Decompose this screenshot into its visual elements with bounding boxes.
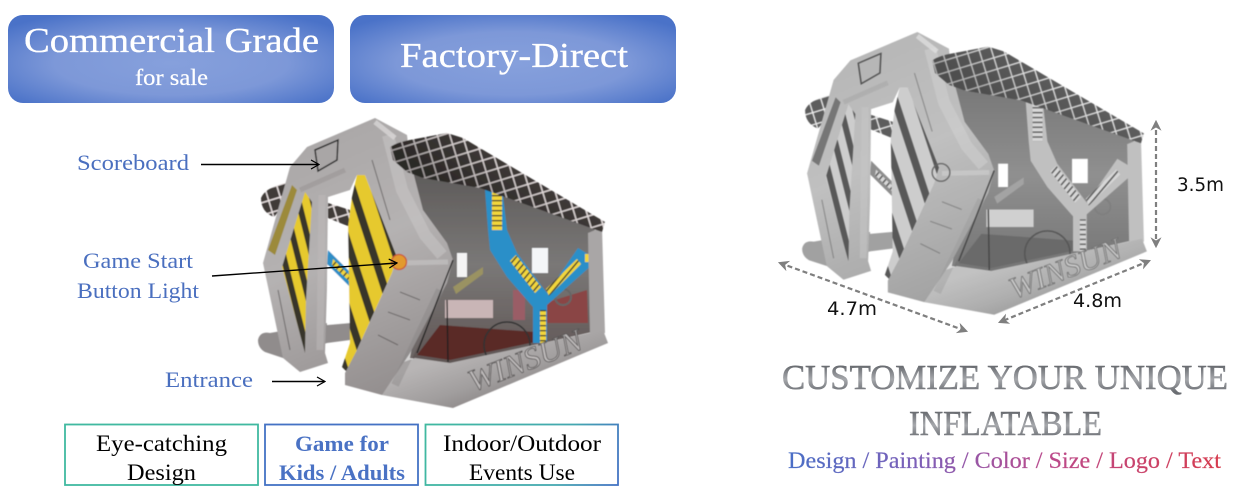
window area	[947, 78, 1134, 272]
rear gold lettering strip	[268, 185, 297, 255]
Y beam	[1026, 99, 1132, 251]
arch and legs frame	[263, 118, 453, 395]
heading: customize: INFLATABLE	[909, 404, 1102, 443]
banner: factory-direct	[350, 15, 676, 103]
window area	[405, 165, 595, 364]
feature box: indoor/outdoor events use: Events Use	[469, 460, 575, 485]
banner: commercial grade	[8, 15, 334, 103]
net roof tube	[932, 47, 1144, 143]
scoreboard outline	[315, 140, 338, 171]
customization options: Design / Painting / Color / Size / Logo / Text	[788, 448, 1222, 473]
zipper lines	[417, 260, 453, 362]
dimension: height: 3.5m	[1177, 174, 1224, 196]
callout: game start button light	[77, 248, 397, 303]
callout: game start button light: Game Start	[83, 248, 193, 273]
floor base	[924, 239, 1147, 315]
dimension: depth: 4.8m	[1073, 290, 1122, 312]
scoreboard outline	[858, 54, 881, 84]
feature box: eye-catching design	[65, 424, 258, 485]
front hazard stripes panel	[885, 88, 939, 280]
start button light	[392, 254, 406, 270]
banner: factory-direct: Factory-Direct	[400, 36, 628, 75]
feature box: indoor/outdoor events use	[426, 424, 618, 485]
banner: commercial grade: for sale	[135, 65, 208, 90]
brand: WINSUN: WINSUN	[463, 321, 590, 399]
feature box: game for kids / adults: Kids / Adults	[279, 460, 405, 485]
right post	[1127, 138, 1144, 246]
heading: customize	[782, 358, 1228, 443]
callout: entrance: Entrance	[165, 367, 253, 392]
dimension: height	[1156, 122, 1224, 246]
back net tube	[261, 183, 296, 217]
rear hazard stripes	[282, 192, 312, 353]
feature box: game for kids / adults: Game for	[295, 431, 389, 456]
frame highlights	[822, 36, 989, 292]
callout: game start button light: Button Light	[77, 278, 199, 303]
dimension: depth	[1000, 261, 1149, 322]
window interior details	[417, 248, 588, 368]
feature box: eye-catching design: Eye-catching	[96, 431, 228, 456]
arch and legs frame	[807, 32, 994, 302]
blue Y beam	[485, 187, 593, 343]
zipper lines	[959, 170, 994, 270]
rear lettering strip	[812, 97, 841, 166]
dimension: width: 4.7m	[827, 298, 877, 320]
callout: scoreboard: Scoreboard	[77, 150, 189, 175]
doorway	[870, 115, 893, 234]
grayscale inflatable photo	[802, 32, 1147, 315]
feature box: indoor/outdoor events use: Indoor/Outdoor	[443, 431, 601, 456]
feature box: eye-catching design: Design	[127, 460, 197, 485]
heading: customize: CUSTOMIZE YOUR UNIQUE	[782, 358, 1228, 397]
right post	[588, 227, 605, 337]
back net tube	[805, 95, 840, 129]
frame highlights	[278, 122, 448, 385]
rear hazard stripes	[826, 104, 855, 261]
ground tube	[258, 323, 350, 358]
start button outline	[932, 164, 950, 181]
colour inflatable photo	[258, 118, 608, 408]
banner: commercial grade: Commercial Grade	[24, 21, 319, 60]
ground tube	[802, 232, 893, 266]
dimension: width	[780, 263, 966, 331]
doorway	[327, 203, 350, 325]
floor base	[382, 330, 608, 408]
feature box: game for kids / adults	[265, 424, 418, 485]
net roof tube	[390, 133, 605, 232]
brand: WINSUN: WINSUN	[1004, 231, 1128, 306]
front hazard stripes panel	[342, 175, 397, 372]
window interior details	[959, 159, 1110, 276]
